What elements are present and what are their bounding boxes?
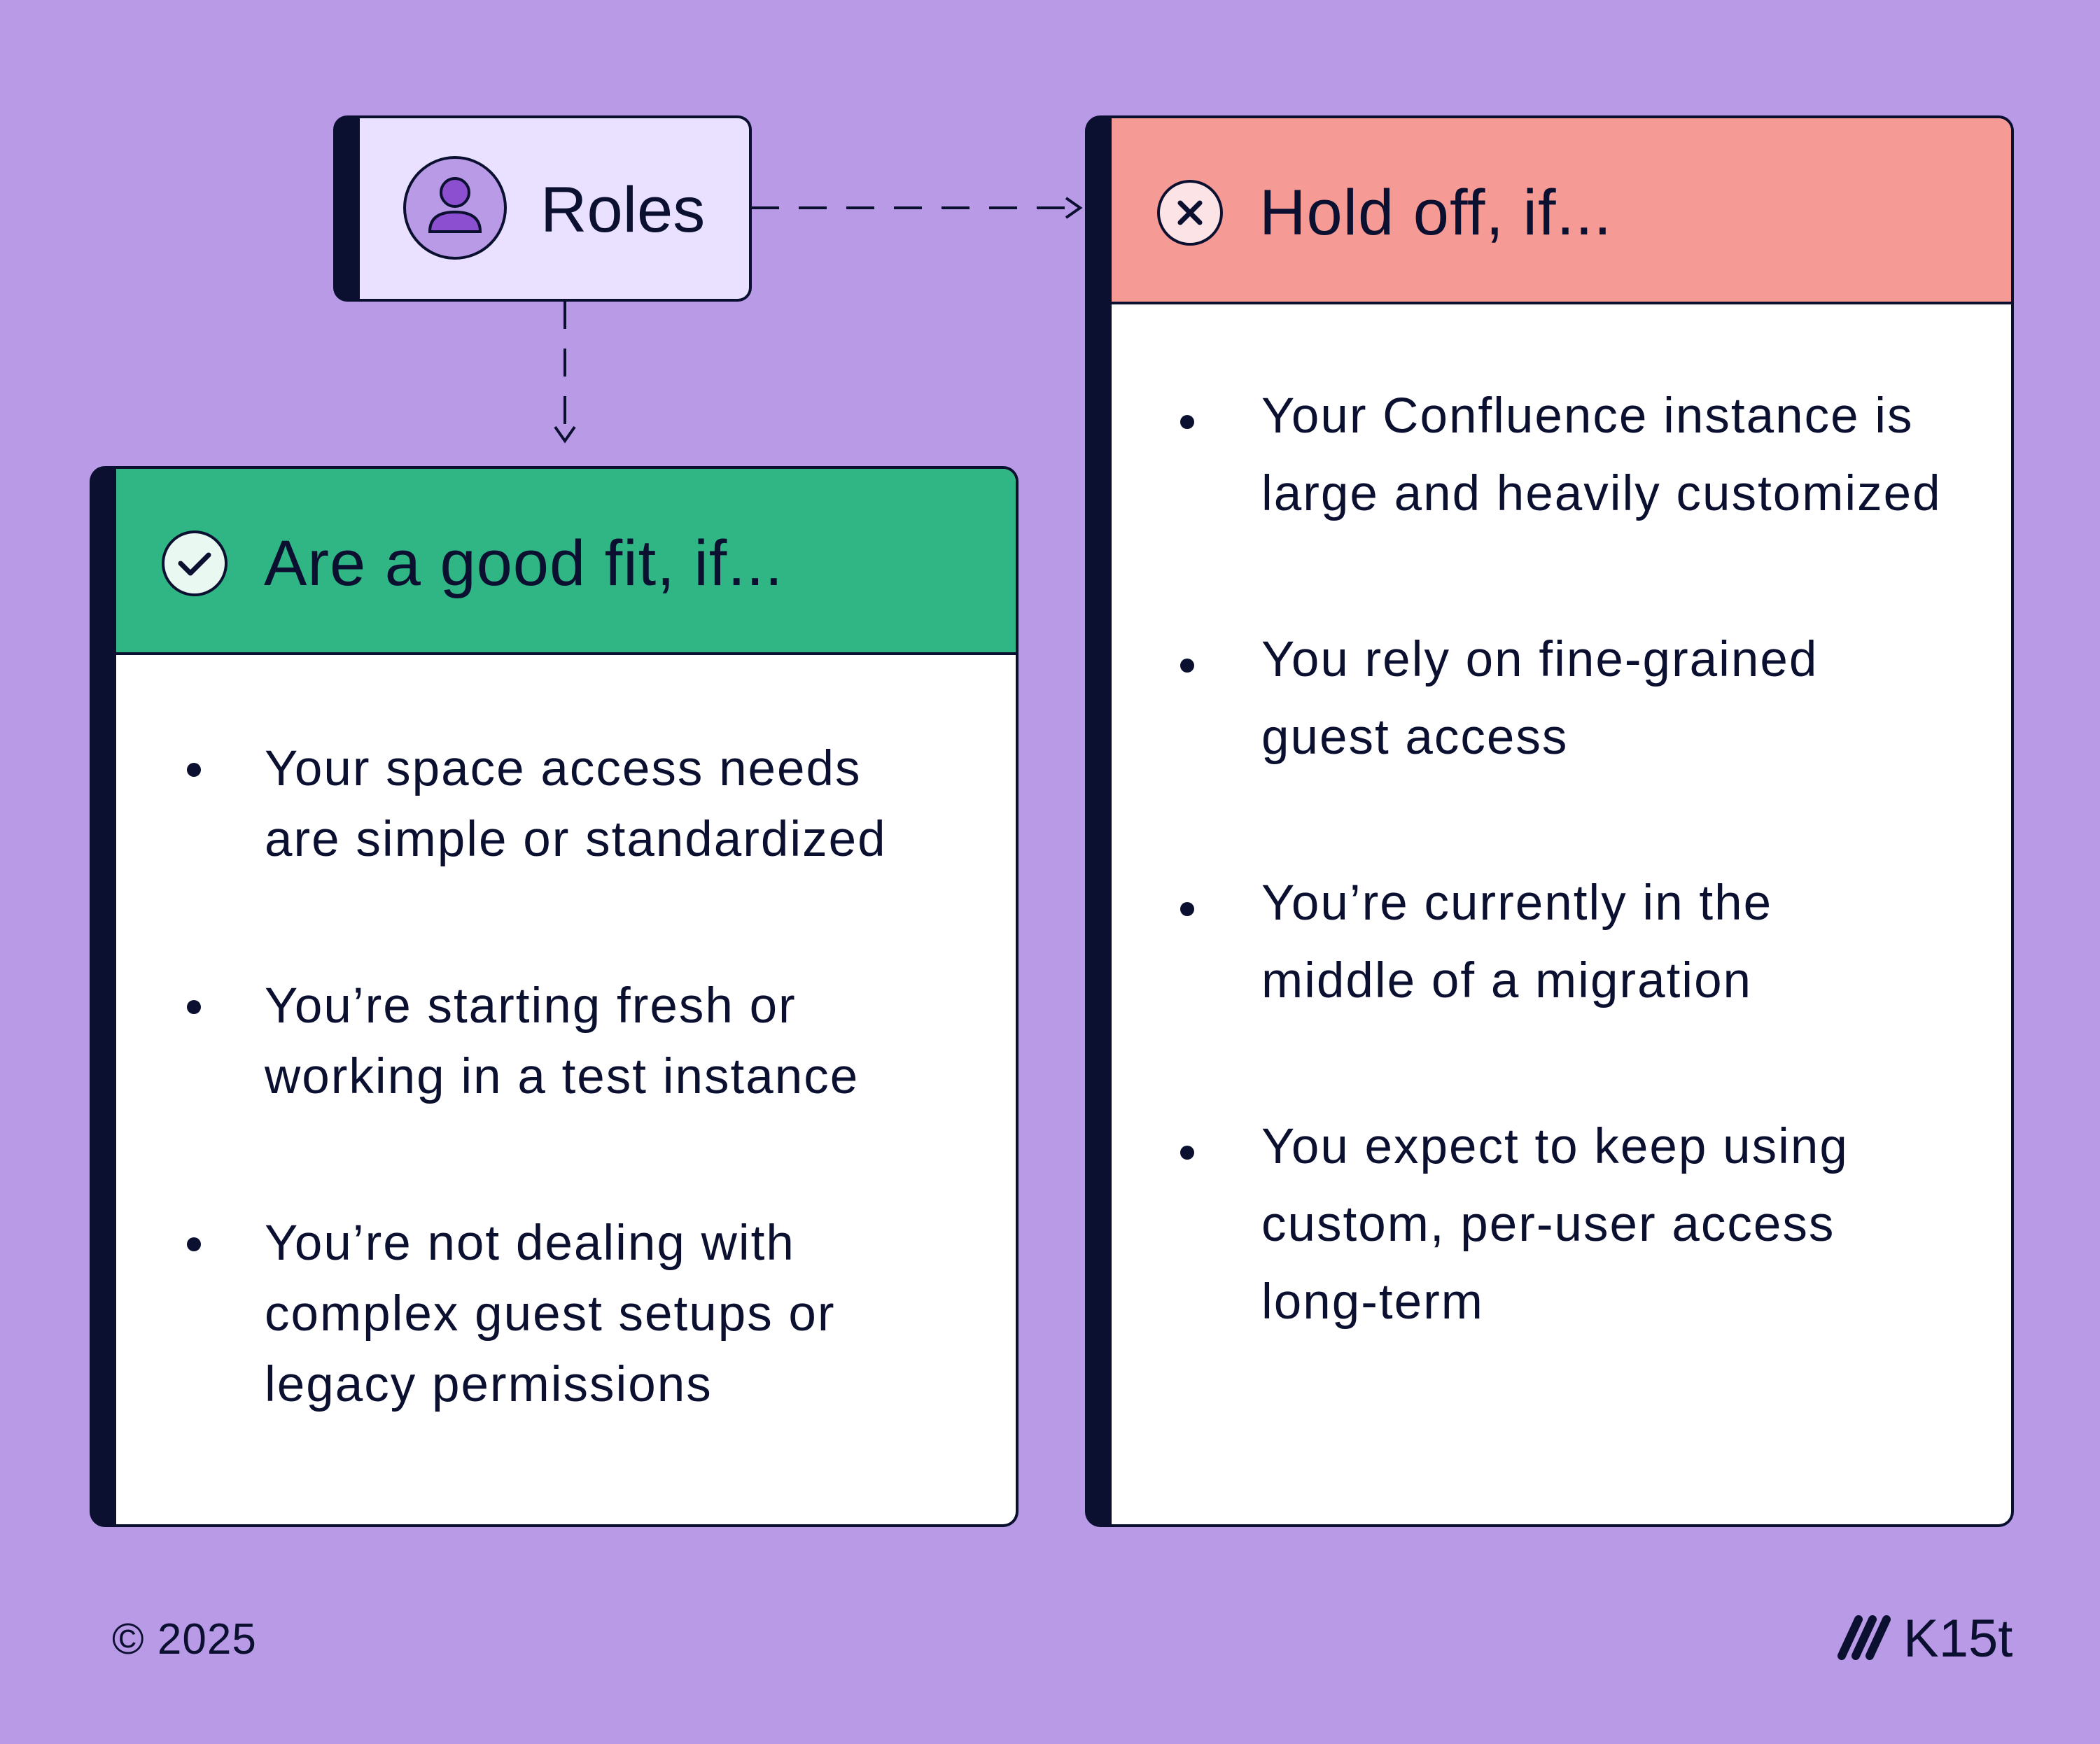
- arrow: roles to good fit: [554, 302, 576, 444]
- header: hold off: Hold off, if...: [1259, 177, 1612, 248]
- list: hold off items: middle of a migration: [1261, 953, 1752, 1008]
- list: hold off items: Your Confluence instance is: [1261, 388, 1914, 444]
- list: good fit items: are simple or standardized: [265, 812, 887, 867]
- list: hold off items: You’re currently in the: [1261, 875, 1772, 931]
- list: good fit items: complex guest setups or: [265, 1286, 836, 1342]
- list: good fit items: working in a test instance: [265, 1049, 859, 1104]
- list: good fit items: Your space access needs: [265, 741, 862, 796]
- panel: good fit: [90, 466, 1018, 1527]
- list: good fit items: [187, 741, 887, 1412]
- header: hold off: [1112, 118, 2011, 304]
- panel: hold off: [1085, 115, 2014, 1527]
- list: good fit items: You’re starting fresh or: [265, 978, 797, 1034]
- list: hold off items: [1180, 388, 1942, 1330]
- header: good fit: [116, 469, 1016, 655]
- list: hold off items: guest access: [1261, 710, 1568, 765]
- list: hold off items: You expect to keep using: [1261, 1119, 1849, 1174]
- list: hold off items: You rely on fine-grained: [1261, 632, 1818, 687]
- footer: copyright: © 2025: [112, 1615, 257, 1664]
- roles box: [333, 115, 752, 302]
- icon: person: [403, 156, 507, 260]
- list: good fit items: legacy permissions: [265, 1357, 713, 1412]
- logo: K15t: K15t: [1903, 1609, 2012, 1668]
- header: good fit: Are a good fit, if...: [264, 528, 783, 599]
- list: hold off items: custom, per-user access: [1261, 1197, 1835, 1252]
- list: hold off items: long-term: [1261, 1274, 1484, 1330]
- logo: K15t: [1837, 1609, 2012, 1668]
- list: hold off items: large and heavily customized: [1261, 466, 1942, 521]
- arrow: roles to hold off: [752, 197, 1082, 219]
- roles label: Roles: [540, 174, 705, 246]
- list: good fit items: You’re not dealing with: [265, 1216, 795, 1271]
